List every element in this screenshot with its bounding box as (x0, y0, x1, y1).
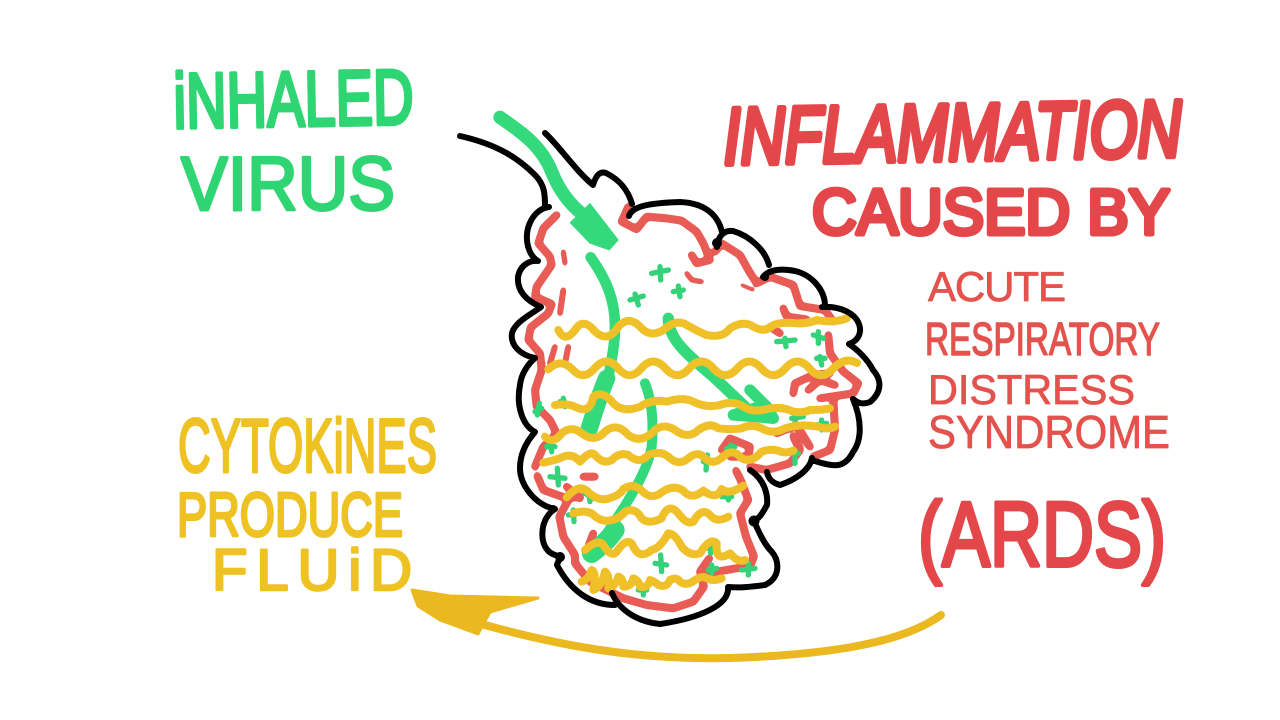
text: acute respiratory distress syndrome: RESPIRATORY (925, 313, 1160, 365)
fluid waves (543, 318, 857, 590)
lung outline (460, 133, 879, 624)
heading: cytokines produce fluid: FLUiD (212, 538, 412, 603)
heading: inhaled virus: VIRUS (181, 142, 395, 227)
heading: cytokines produce fluid: PRODUCE (177, 481, 403, 550)
label: ARDS: (ARDS) (918, 484, 1166, 586)
heading: inflammation caused by (723, 84, 1182, 248)
text: acute respiratory distress syndrome: ACUTE (928, 263, 1066, 310)
lung inflammation outline (528, 207, 858, 608)
airway and vessels (500, 117, 773, 553)
heading: inflammation caused by: CAUSED BY (812, 176, 1170, 248)
heading: cytokines produce fluid (177, 404, 437, 603)
heading: inhaled virus (173, 53, 414, 227)
text: acute respiratory distress syndrome: DISTRESS (928, 366, 1135, 413)
lung diagram (460, 117, 879, 624)
text: acute respiratory distress syndrome (925, 263, 1170, 458)
heading: cytokines produce fluid: CYTOKiNES (178, 404, 437, 489)
arrow: ARDS to cytokines (412, 590, 941, 658)
heading: inhaled virus: iNHALED (173, 53, 414, 145)
text: acute respiratory distress syndrome: SYNDROME (928, 406, 1170, 458)
virus particles (535, 267, 827, 595)
